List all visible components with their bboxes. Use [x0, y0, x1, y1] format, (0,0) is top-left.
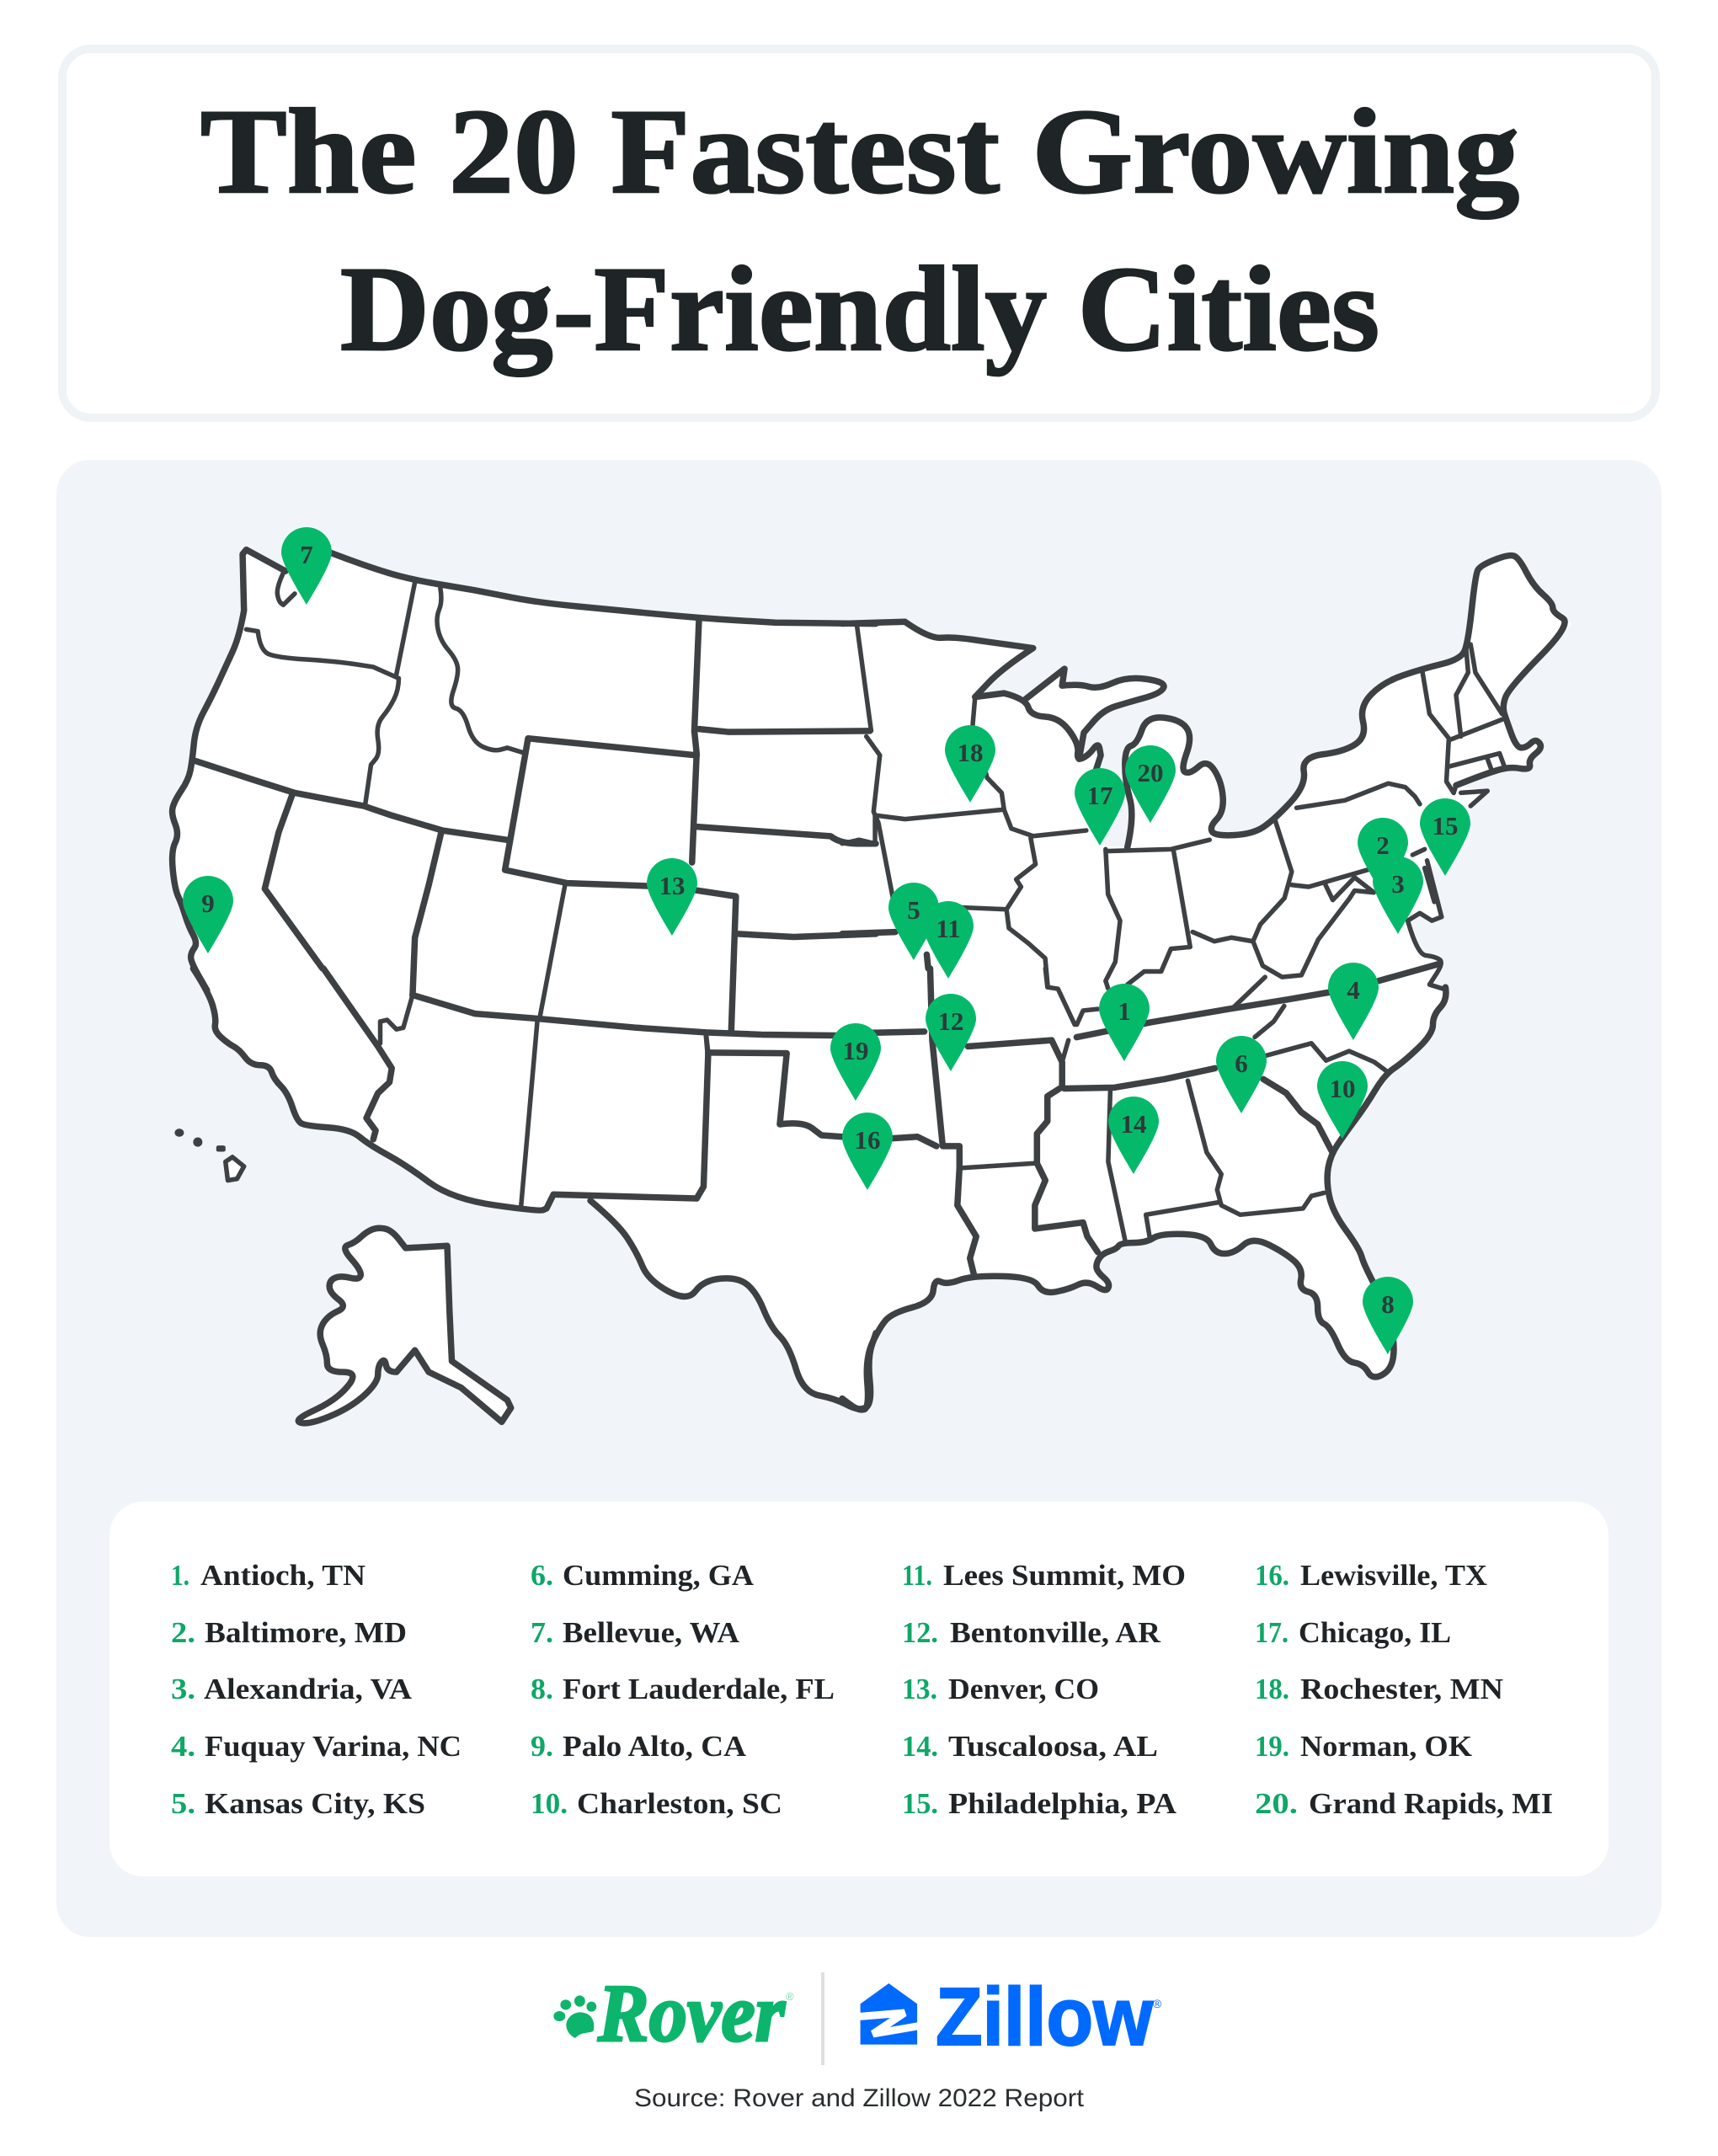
pin 16: 16: [854, 1125, 881, 1155]
registered mark: ®: [1153, 1997, 1162, 2010]
list background: [109, 1502, 1609, 1876]
heading: The 20 Fastest Growing: [200, 85, 1519, 219]
pin 8: [1363, 1277, 1413, 1354]
southeastern states borders: [842, 969, 1446, 1410]
list column 3: 13.: [902, 1673, 937, 1705]
map of the United States: [171, 550, 1572, 1423]
list column 1: Fuquay Varina, NC: [205, 1730, 462, 1763]
list column 1: 3.: [171, 1673, 195, 1705]
list column 4: 17.: [1255, 1616, 1288, 1649]
list column 3: Lees Summit, MO: [943, 1559, 1186, 1592]
pin 19: 19: [842, 1036, 869, 1065]
pin 7: 7: [300, 540, 313, 569]
pin 4: [1328, 963, 1379, 1040]
southwestern states borders: [193, 969, 876, 1409]
pin 18: 18: [957, 738, 984, 767]
source note: Source: Rover and Zillow 2022 Report: [634, 2084, 1085, 2112]
list column 1: Kansas City, KS: [205, 1787, 425, 1820]
panel: title: [62, 49, 1656, 418]
list column 1: 4.: [171, 1730, 195, 1763]
list column 2: 8.: [531, 1673, 553, 1705]
pin 16: [842, 1113, 893, 1190]
logo: Rover: [553, 1968, 794, 2059]
list column 4: Lewisville, TX: [1300, 1559, 1487, 1592]
list column 1: 5.: [171, 1787, 195, 1820]
pin 17: 17: [1086, 781, 1113, 810]
list column 2: Bellevue, WA: [563, 1616, 740, 1649]
Alaska and Hawaii outlines: [174, 1129, 511, 1423]
list column 2: Charleston, SC: [577, 1787, 782, 1820]
pin 6: 6: [1235, 1049, 1248, 1078]
list column 3: 12.: [902, 1616, 938, 1649]
pin 20: [1125, 745, 1176, 823]
list column 1: Baltimore, MD: [205, 1616, 407, 1649]
icon: paw: [553, 1995, 596, 2038]
pin 14: [1108, 1097, 1159, 1174]
pin 1: [1099, 984, 1150, 1061]
list column 4: [1255, 1559, 1553, 1820]
pin 3: 3: [1391, 869, 1405, 899]
list column 1: Antioch, TN: [200, 1559, 365, 1592]
pin 9: [183, 876, 233, 953]
Zillow wordmark: Zillow: [936, 1971, 1154, 2063]
list column 2: Fort Lauderdale, FL: [563, 1673, 835, 1705]
list column 3: Philadelphia, PA: [948, 1787, 1177, 1820]
pin 11: 11: [936, 914, 961, 943]
pin 20: 20: [1137, 758, 1164, 787]
list column 4: Chicago, IL: [1299, 1616, 1451, 1649]
list column 2: 9.: [531, 1730, 553, 1763]
pin 15: 15: [1432, 811, 1459, 841]
list column 1: 1.: [171, 1559, 189, 1592]
list column 4: 20.: [1255, 1787, 1298, 1820]
pin 11: [923, 901, 974, 979]
divider: [821, 1972, 824, 2065]
list column 4: 18.: [1255, 1673, 1289, 1705]
land fills: [171, 550, 1572, 1423]
pin 10: [1317, 1061, 1368, 1139]
Rover wordmark: Rover: [597, 1968, 786, 2059]
pin 17: [1075, 768, 1125, 846]
panel: city list: [109, 1502, 1609, 1876]
pin 6: [1216, 1036, 1267, 1113]
pin 18: [945, 725, 995, 803]
pin 4: 4: [1347, 975, 1360, 1005]
list column 2: 10.: [531, 1787, 568, 1820]
pin 1: 1: [1118, 996, 1131, 1026]
pin 5: [888, 883, 939, 960]
title frame: [62, 49, 1656, 418]
list column 3: 15.: [902, 1787, 938, 1820]
list column 1: [171, 1559, 462, 1820]
list column 2: [531, 1559, 835, 1820]
list column 3: 14.: [902, 1730, 938, 1763]
pin 2: [1358, 818, 1408, 895]
list column 2: 7.: [531, 1616, 553, 1649]
pin 12: 12: [938, 1006, 963, 1036]
pin 12: [926, 994, 976, 1071]
list column 3: Denver, CO: [948, 1673, 1099, 1705]
pin 13: 13: [659, 871, 686, 900]
list column 3: Tuscaloosa, AL: [948, 1730, 1158, 1763]
Hawaii: [174, 1129, 244, 1181]
list column 3: [902, 1559, 1186, 1820]
registered mark: ®: [786, 1990, 794, 2003]
list column 4: 19.: [1255, 1730, 1289, 1763]
pin 2: 2: [1376, 830, 1390, 860]
list column 2: 6.: [531, 1559, 553, 1592]
pin 15: [1420, 798, 1470, 876]
list column 4: Grand Rapids, MI: [1309, 1787, 1553, 1820]
list column 3: 11.: [902, 1559, 932, 1592]
midwest and eastern states borders: [842, 556, 1565, 1038]
list column 4: Norman, OK: [1300, 1730, 1472, 1763]
list column 1: Alexandria, VA: [204, 1673, 413, 1705]
list column 1: 2.: [171, 1616, 195, 1649]
heading: Dog-Friendly Cities: [340, 243, 1379, 376]
state border lines: [173, 550, 1565, 1423]
pin 5: 5: [907, 895, 920, 925]
logo: Zillow: [857, 1971, 1162, 2063]
icon: Zillow house: [857, 1983, 920, 2045]
list column 2: Palo Alto, CA: [563, 1730, 747, 1763]
panel: map background: [56, 460, 1662, 1937]
pin 7: [281, 527, 332, 605]
list column 4: 16.: [1255, 1559, 1289, 1592]
pin 9: 9: [201, 889, 215, 918]
pin 10: 10: [1329, 1074, 1356, 1103]
list column 3: Bentonville, AR: [950, 1616, 1161, 1649]
pin 8: 8: [1381, 1289, 1395, 1319]
western states borders: [173, 550, 876, 1062]
list column 2: Cumming, GA: [563, 1559, 755, 1592]
Alaska: [298, 1228, 511, 1423]
pin 19: [830, 1023, 881, 1101]
pin 14: 14: [1120, 1109, 1147, 1139]
pin 3: [1373, 857, 1423, 934]
list column 4: Rochester, MN: [1300, 1673, 1503, 1705]
pin 13: [647, 858, 697, 936]
heading: [200, 85, 1519, 376]
